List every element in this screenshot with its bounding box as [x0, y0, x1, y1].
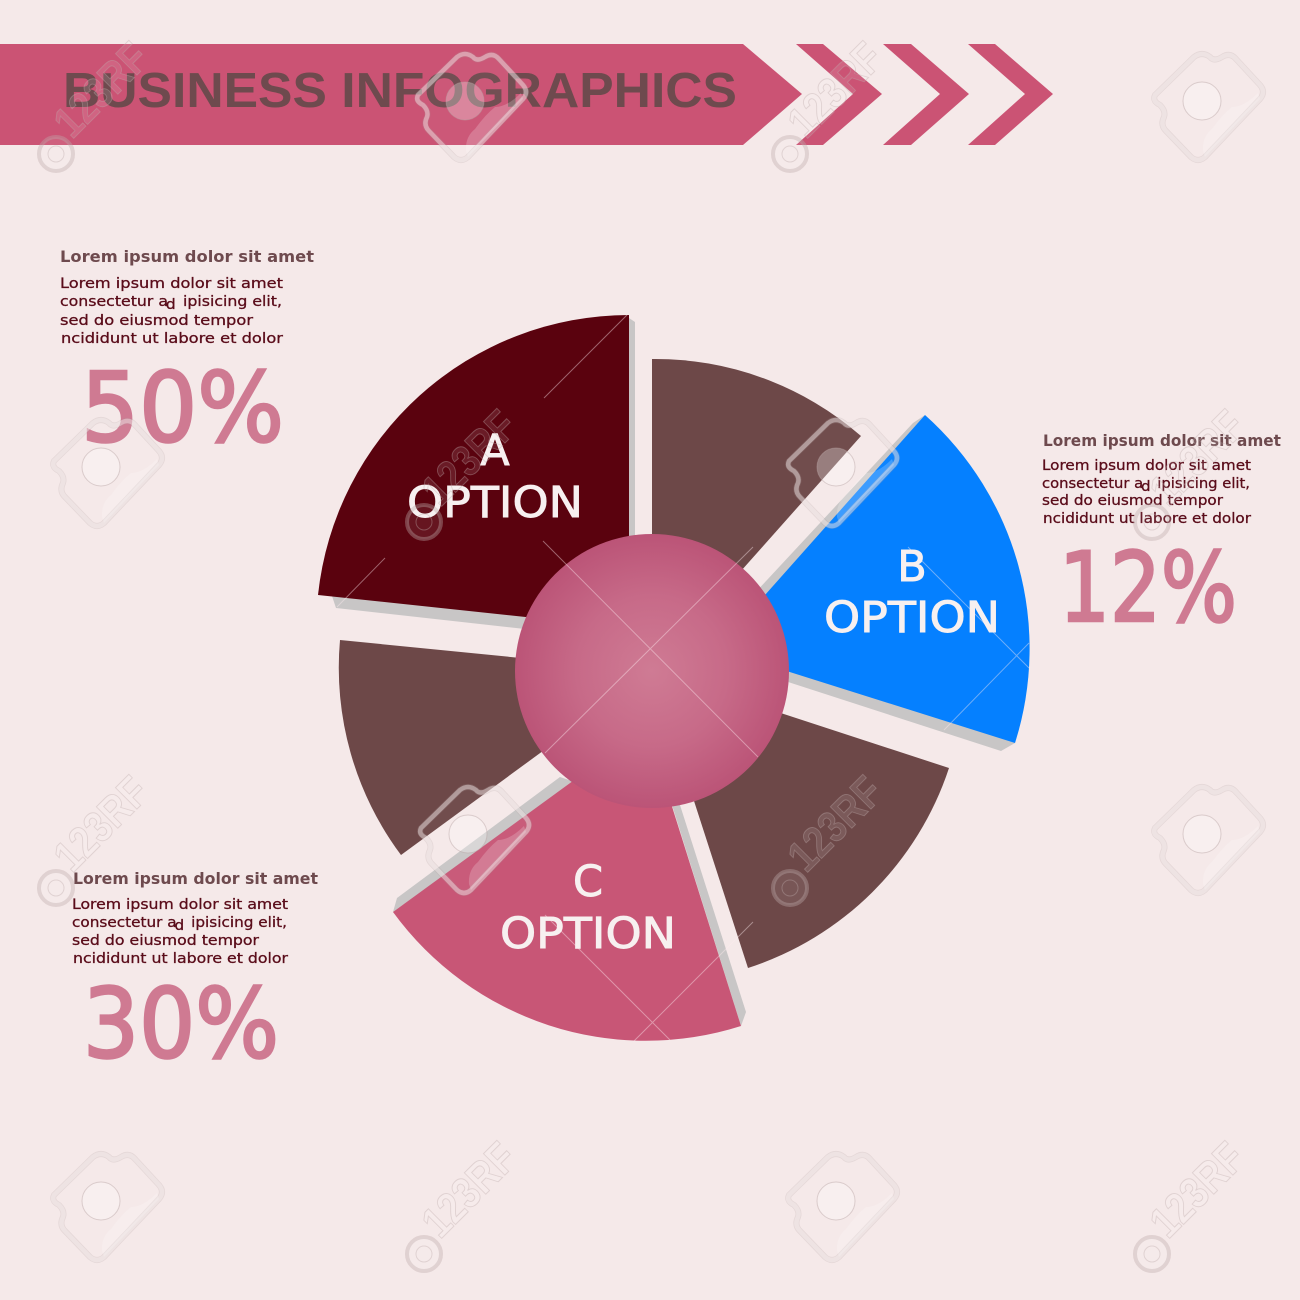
watermark overlay: 123RF [412, 1133, 526, 1247]
segment: brown top [652, 359, 861, 671]
watermark overlay: 123RF [778, 767, 892, 881]
text block: B: Lorem ipsum dolor sit amet [1043, 431, 1281, 450]
segment: brown left [339, 640, 652, 855]
label: A option: A [480, 426, 510, 476]
watermark overlay: 123RF [44, 33, 158, 147]
pie chart [318, 315, 1030, 1041]
text block: C: Lorem ipsum dolor sit amet [72, 897, 288, 913]
label: C option: C [573, 857, 603, 907]
text block: A [60, 247, 314, 347]
text block: B: consectetur a [1042, 476, 1141, 492]
text block: B: Lorem ipsum dolor sit amet [1042, 458, 1251, 474]
text block: A: ipisicing elit, [178, 294, 282, 310]
text block: C: Lorem ipsum dolor sit amet [73, 869, 318, 888]
header banner arrow [0, 44, 802, 145]
text block: C: ncididunt ut labore et dolor [73, 951, 288, 967]
segment: brown lower right [652, 671, 949, 968]
text block: B: d [1141, 479, 1151, 495]
segment: A [318, 315, 629, 628]
label: B option [824, 542, 1000, 643]
text block: A: sed do eiusmod tempor [60, 313, 253, 329]
watermark overlay: 123RF [1140, 401, 1254, 515]
text block: A: Lorem ipsum dolor sit amet [60, 276, 283, 292]
text block: A: consectetur a [60, 294, 159, 310]
text block: B: ipisicing elit, [1153, 476, 1250, 492]
label: C option: OPTION [500, 909, 676, 959]
label: C option [500, 857, 676, 959]
text block: B: sed do eiusmod tempor [1042, 493, 1223, 509]
percentage: 50%: 50% [81, 352, 284, 464]
percentage: 30%: 30% [83, 968, 279, 1080]
watermark overlay: 123RF [778, 33, 892, 147]
text block: A: ncididunt ut labore et dolor [61, 331, 283, 347]
watermark overlay: 123RF [1140, 1133, 1254, 1247]
text block: B: ncididunt ut labore et dolor [1043, 511, 1251, 527]
text block: A: d [166, 297, 176, 313]
label: A option: OPTION [407, 478, 583, 528]
text block: C: d [174, 918, 184, 934]
text block: C: ipisicing elit, [186, 915, 287, 931]
text block: C: sed do eiusmod tempor [72, 933, 259, 949]
segment: C [393, 727, 741, 1041]
watermark overlay: 123RF [412, 401, 526, 515]
segment shadows [332, 318, 1015, 1026]
segment: B [717, 415, 1030, 743]
title: BUSINESS INFOGRAPHICS [63, 64, 737, 118]
watermark overlay: 123RF [44, 767, 158, 881]
text block: C: consectetur a [72, 915, 171, 931]
text block: C [72, 869, 318, 967]
label: B option: OPTION [824, 593, 1000, 643]
center sphere [515, 534, 789, 808]
label: B option: B [897, 542, 927, 592]
label: A option [407, 426, 583, 528]
chevron arrows [796, 44, 1053, 145]
text block: A: Lorem ipsum dolor sit amet [60, 247, 314, 266]
percentage: 12%: 12% [1059, 532, 1237, 644]
text block: B [1042, 431, 1281, 527]
